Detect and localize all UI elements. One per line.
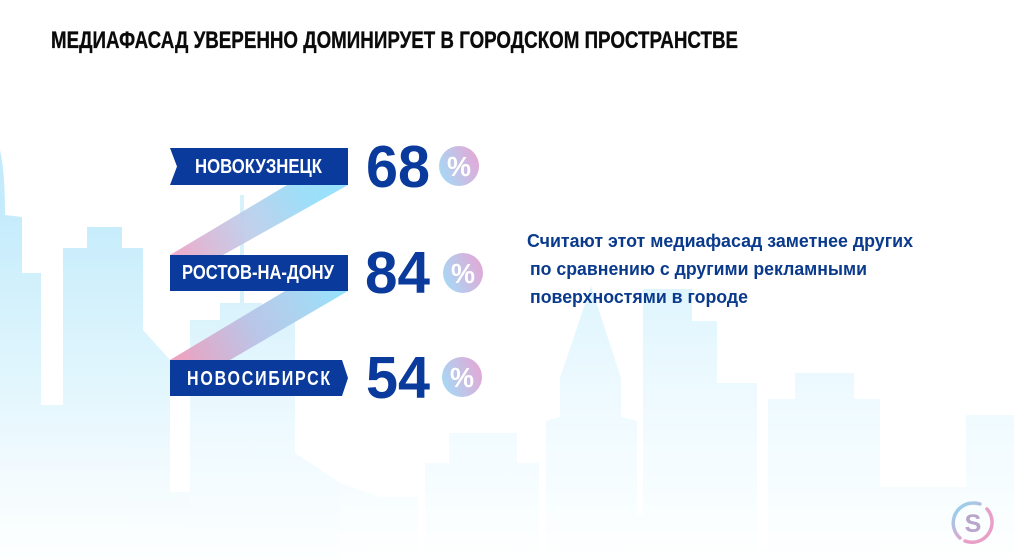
city name: РОСТОВ-НА-ДОНУ (182, 262, 334, 284)
title: МЕДИАФАСАД УВЕРЕННО ДОМИНИРУЕТ В ГОРОДСКОМ ПРОСТРАНСТВЕ (51, 27, 738, 54)
description text (527, 230, 914, 307)
ribbon: upper diagonal (170, 185, 348, 255)
background city skyline (0, 150, 1014, 559)
icon: S logo (953, 503, 992, 542)
icon: percent badge (443, 253, 483, 293)
description text: поверхностями в городе (530, 286, 748, 307)
description text: Считают этот медиафасад заметнее других (527, 230, 914, 251)
row: Новокузнецк (170, 134, 479, 200)
icon: S logo: S (965, 510, 981, 538)
city banner (170, 148, 348, 185)
row: Новосибирск (170, 345, 482, 411)
icon: percent badge: % (450, 362, 474, 393)
icon: percent badge (442, 357, 482, 397)
city name: НОВОСИБИРСК (187, 367, 331, 389)
ribbon: lower diagonal (170, 291, 348, 360)
city name: НОВОКУЗНЕЦК (195, 156, 323, 178)
value: 54 (366, 345, 430, 411)
value: 84 (365, 240, 430, 306)
icon: percent badge: % (451, 258, 475, 289)
description text: по сравнению с другими рекламными (530, 258, 867, 279)
row: Ростов-на-Дону (170, 240, 483, 306)
city banner (170, 360, 348, 396)
icon: percent badge: % (447, 151, 471, 182)
value: 68 (366, 134, 430, 200)
city banner (170, 255, 348, 291)
icon: percent badge (439, 146, 479, 186)
